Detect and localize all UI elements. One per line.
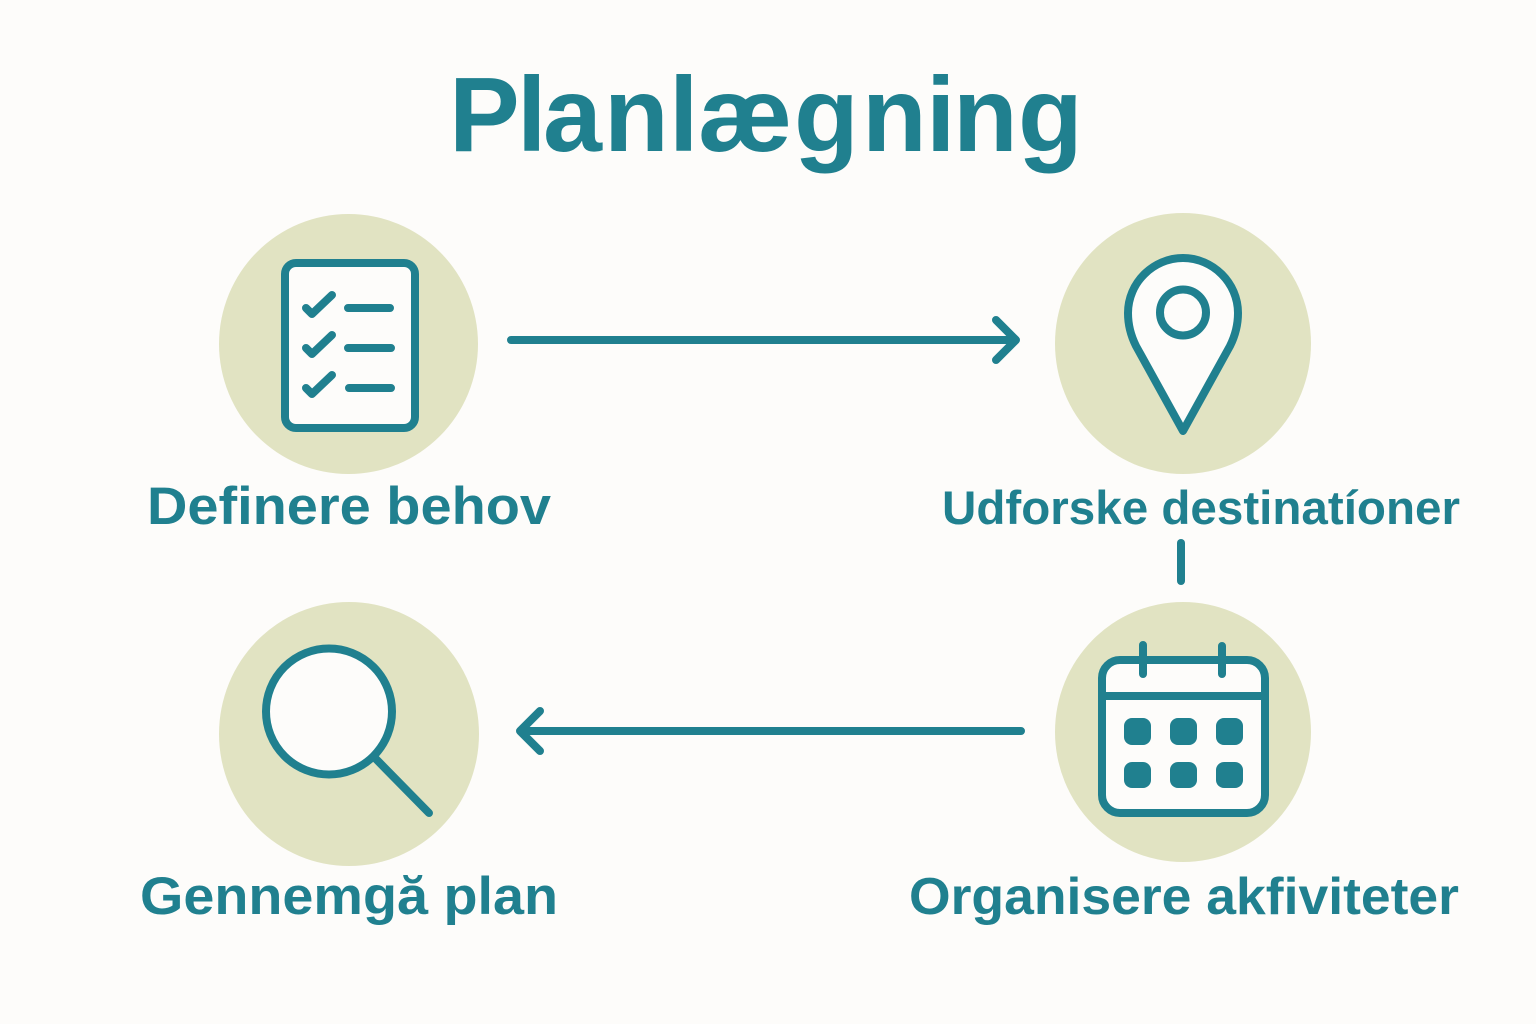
label: udforske destinationer: Udforske destinatíoner [942, 481, 1460, 534]
circle: gennemgå plan [219, 602, 479, 866]
arrow: behov to destinationer [511, 320, 1016, 360]
step 2: udforske destinationer [942, 213, 1460, 534]
step 3: organisere aktiviteter [909, 602, 1459, 926]
label: gennemgå plan: Gennemgă plan [140, 867, 558, 926]
arrow: aktiviteter to plan [520, 711, 1021, 751]
icon: map pin [1128, 258, 1238, 431]
icon: checklist [285, 263, 415, 428]
circle: definere behov [219, 214, 478, 474]
step 1: definere behov [147, 214, 552, 536]
step 4: gennemgå plan [140, 602, 558, 926]
circle: organisere aktiviteter [1055, 602, 1311, 862]
icon: calendar [1102, 645, 1265, 813]
label: organisere aktiviteter: Organisere akfiviteter [909, 868, 1459, 926]
label: definere behov: Definere behov [147, 477, 552, 536]
connector: destinationer to aktiviteter [1177, 543, 1185, 581]
icon: magnifying glass [266, 648, 429, 813]
title: Planlægning [449, 56, 1083, 174]
circle: udforske destinationer [1055, 213, 1311, 474]
